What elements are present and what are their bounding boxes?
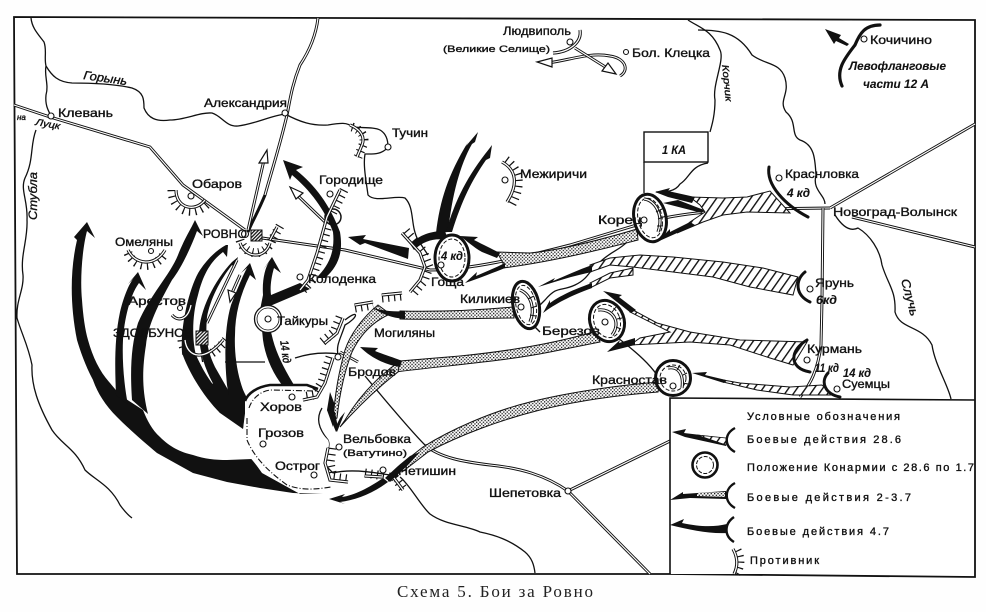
arrow: from Khorov past Taikury — [260, 257, 310, 385]
legend item: Konarmiya position — [692, 452, 974, 478]
tip: towards Goshcha, upper — [460, 236, 500, 258]
enemy: Zdolbunov — [182, 340, 226, 358]
label: road to Lutsk: на — [17, 113, 26, 122]
labels: towns south — [343, 432, 561, 500]
labels: towns south: Шепетовка — [489, 486, 561, 500]
tip: Suemtsy — [692, 372, 726, 383]
band: Brodov to Vetutino — [340, 361, 400, 427]
black arrow tips of dotted bands — [327, 236, 505, 482]
battles of 28.6: hatched bands — [590, 191, 833, 395]
pocket dash-dot line — [247, 390, 331, 489]
pocket: Khorov, Grozov, Ostrog — [245, 385, 331, 491]
battles of 4.7: black arrows — [72, 132, 492, 504]
enemy: Tuchin — [350, 125, 364, 157]
labels: towns west: Колоденка — [308, 272, 376, 286]
labels: towns centre and east: Новоград-Волынск — [833, 205, 958, 219]
legend item: enemy — [733, 549, 819, 574]
enemy combs — [128, 125, 518, 491]
legend item: combat 4.7 — [670, 517, 889, 542]
battles of 2-3.7: dotted bands — [333, 229, 660, 472]
band: Mogilyany to Brodov — [333, 305, 390, 420]
label: rivers: Стубла — [26, 172, 40, 220]
ring: Krasnostav — [656, 360, 690, 396]
labels: towns centre and east — [277, 167, 958, 391]
Lyudvipol double arc — [553, 30, 580, 53]
arrow: big western sweep — [72, 222, 323, 494]
legend item: combat 4.7: Боевые действия 4.7 — [747, 526, 889, 538]
band: Suemtsy — [723, 380, 833, 395]
enemy: Mezhirichi — [502, 160, 518, 204]
labels: towns west: Обаров — [192, 177, 242, 191]
tip: Korets middle — [663, 200, 704, 213]
arrow: towards Omelyany — [115, 272, 146, 405]
tip: towards Goshcha, lower — [465, 263, 505, 283]
legend title: Условные обозначения — [747, 411, 900, 423]
legend item: combat 28.6: Боевые действия 28.6 — [747, 434, 901, 446]
labels: towns centre and east: Могиляны — [374, 326, 435, 340]
labels: towns centre and east: Ярунь — [815, 276, 854, 290]
label: rivers: Корчик — [719, 64, 734, 103]
label: rivers — [26, 64, 921, 317]
left flank units of 12th army — [840, 25, 880, 86]
band: Yarun upper and main — [590, 255, 798, 295]
labels: towns centre and east: 11 кд — [815, 361, 839, 375]
merged arrow base — [200, 378, 247, 429]
labels: towns west: РОВНО — [203, 227, 247, 241]
arrow: Lyudvipol south-east — [575, 48, 616, 74]
arrow: towards Rovno, second — [199, 257, 238, 402]
labels: towns centre and east: Краснловка — [785, 167, 859, 181]
labels: towns west: Тучин — [392, 126, 428, 140]
labels: towns west: Острог — [275, 459, 321, 473]
arrow: Zdolbunov to Rovno — [207, 260, 237, 323]
labels: towns west: Хоров — [260, 400, 302, 414]
enemy: Arestov arc — [172, 305, 191, 319]
labels: towns north: Людвиполь — [503, 24, 571, 38]
labels: towns north: Бол. Клецка — [632, 46, 710, 60]
enemy: Brodov — [302, 357, 333, 400]
enemy: Rovno arc — [240, 240, 272, 255]
band: Krasnostav to Netishin — [400, 382, 660, 472]
labels: towns west: Омеляны — [115, 235, 173, 249]
4th cavalry division — [769, 167, 808, 217]
labels: towns centre and east: 6кд — [816, 293, 837, 307]
tip: Korets lower — [657, 222, 695, 242]
labels: towns centre and east: Красностав — [592, 373, 667, 387]
white withdrawal arrows — [207, 48, 625, 323]
arrow: to Gorodishche — [290, 187, 325, 222]
black arrow tips of hatched bands — [538, 188, 726, 383]
labels: towns centre and east: Корец — [598, 213, 642, 227]
Zdolbunov town block — [196, 331, 208, 345]
box: 1st Cavalry Army — [644, 132, 708, 162]
labels: towns north: части 12 А — [863, 77, 929, 91]
labels: towns south: (Ватутино) — [343, 448, 407, 459]
labels: towns north: Межиричи — [520, 167, 587, 181]
caption: Схема 5. Бои за Ровно — [397, 582, 593, 601]
arrow: towards Rovno, third — [225, 263, 256, 429]
place labels — [17, 24, 958, 500]
tip: Brodov down — [327, 410, 338, 432]
enemy: Velbovka — [325, 448, 348, 482]
legend item: enemy: Противник — [750, 555, 819, 567]
labels: towns west: Клевань — [58, 106, 113, 120]
arrow: 12th army left flank — [825, 29, 849, 46]
tip: Yarun lower — [543, 283, 592, 313]
labels: towns west: ЗДОЛБУНОВ — [113, 326, 193, 340]
labels: towns centre and east: Березов — [542, 324, 600, 338]
14th cavalry division — [824, 373, 840, 397]
arrow: Khorov hook near Vetutino — [329, 478, 388, 504]
arrow: south of Rovno — [228, 275, 240, 302]
labels: towns north: Левофланговые — [848, 59, 946, 73]
band: Kurman — [630, 310, 807, 365]
band: Kilikiev to Mogilyany — [400, 307, 514, 319]
tip: Kurman lower — [607, 338, 635, 352]
labels: towns centre and east: Бродов — [348, 365, 396, 379]
labels: towns west: Александрия — [204, 96, 287, 110]
arrow: past Gorodishche — [283, 160, 341, 278]
ring: Taikury — [254, 306, 282, 332]
labels: towns west — [58, 96, 428, 473]
labels: towns south: Нетишин — [398, 464, 456, 478]
enemy: Netishin — [365, 473, 405, 491]
labels: towns centre and east: Суемцы — [842, 377, 890, 391]
legend item: combat 2-3.7 — [670, 483, 911, 508]
labels: towns centre and east: Курмань — [807, 342, 862, 356]
band: Yarun lower — [590, 268, 633, 288]
arrow: towards Rovno, first — [182, 245, 232, 413]
label: road to Lutsk: Луцк — [33, 117, 62, 132]
Konarmiya position rings — [254, 191, 690, 396]
tip: Kurman upper — [603, 291, 636, 313]
enemy: Mogilyany lower — [355, 302, 373, 308]
pocket outline — [245, 385, 318, 401]
legend item: Konarmiya position: Положение Конармии с 28.6 по 1.7 — [747, 462, 974, 474]
labels: towns centre and east: 14 кд — [843, 366, 871, 380]
settlement markers — [48, 36, 867, 494]
labels: towns west: Арестов — [128, 294, 186, 308]
ring: Berezov — [584, 295, 630, 347]
legend panel — [670, 398, 975, 574]
label: rivers: Горынь — [83, 68, 128, 88]
enemy: Goshcha — [402, 231, 429, 294]
arrow tails near Brodov — [327, 392, 335, 427]
band: Korets to Goshcha — [497, 229, 638, 268]
arrow: towards Obarov — [131, 220, 203, 414]
legend item: combat 2-3.7: Боевые действия 2-3.7 — [747, 492, 911, 504]
enemy: Obarov — [172, 190, 208, 211]
labels: towns south: Вельбовка — [343, 432, 411, 446]
labels: towns centre and east: Киликиев — [460, 292, 520, 306]
labels: towns north: (Великие Селище) — [443, 44, 550, 55]
arrow: west of Goshcha — [348, 235, 409, 259]
labels: towns west: Городище — [319, 173, 383, 187]
ring: Kilikiev — [508, 279, 544, 331]
labels: towns west: Тайкуры — [277, 314, 328, 328]
enemy: Omelyany — [128, 250, 165, 265]
Rovno town block — [251, 230, 262, 241]
arrow: north of Goshcha, first — [436, 132, 478, 233]
tip: towards Brodov — [360, 347, 402, 367]
labels: towns north: 1 КА — [662, 143, 686, 157]
tip: towards Mogilyany — [373, 308, 405, 319]
ring: Korets — [629, 191, 671, 245]
arrow: north of Rovno — [248, 150, 268, 230]
division positions: thick arcs — [769, 25, 880, 397]
11th cavalry division — [794, 340, 810, 372]
labels: towns west: Грозов — [258, 426, 304, 440]
enemy: Gorodishche — [300, 190, 344, 291]
enemy: Rovno east — [270, 226, 280, 240]
label: road to Lutsk — [17, 113, 62, 132]
labels: towns north: Кочичино — [870, 33, 932, 47]
enemy: west of Mogilyany — [322, 317, 343, 343]
tip: towards Krasnostav band end — [385, 452, 420, 482]
labels: towns north — [443, 24, 946, 181]
ring: 4th cavalry at Goshcha — [435, 235, 469, 281]
arc over Goshcha — [410, 231, 448, 250]
labels: towns centre and east: 4 кд — [786, 186, 810, 200]
arrow: Lyudvipol west — [537, 55, 625, 76]
label: rivers: Случь — [898, 277, 921, 317]
tip: Yarun upper — [538, 265, 592, 287]
labels: towns centre and east: Гоща — [431, 275, 464, 289]
arrow: north of Goshcha, second — [446, 145, 492, 232]
labels: towns centre and east: 4 кд — [440, 249, 463, 263]
band: Berezov to Brodov — [396, 331, 600, 372]
labels: towns centre and east: 14 кд — [277, 339, 294, 364]
ring: Gorodishche — [325, 209, 341, 225]
enemy: Mogilyany upper — [382, 293, 402, 298]
band: Krasnilovka to Korets — [677, 191, 790, 233]
legend item: combat 28.6 — [672, 428, 901, 452]
tip: Korets upper — [655, 188, 695, 203]
6th cavalry division — [798, 272, 810, 302]
